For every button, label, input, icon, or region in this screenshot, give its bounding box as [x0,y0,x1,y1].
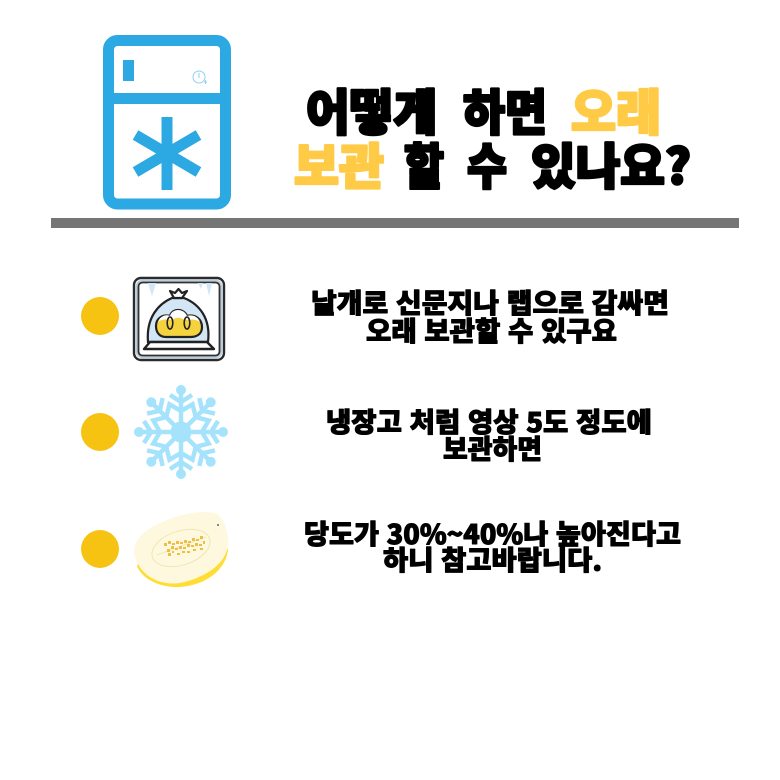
icon: freezer [108,40,226,204]
title: 오래 [571,74,661,145]
item 2: refrigerate [81,385,652,479]
bullet dot 2 [81,413,119,451]
icon: snowflake [134,385,228,479]
text: item 3: 당도가 30%~40%나 높아진다고 [304,513,681,552]
text: item 1: 날개로 신문지나 랩으로 감싸면 [311,282,669,321]
icon: melon half [134,512,228,587]
text: item 2: 보관하면 [443,428,542,467]
icon: frozen dough bag [134,278,224,360]
text: item 3 [304,513,681,578]
title: 수 [467,128,507,199]
title: 하면 [463,74,547,145]
divider bar [51,218,739,228]
text: item 1 [311,282,669,349]
title: 있나요? [531,128,691,199]
text: item 1: 오래 보관할 수 있구요 [366,310,617,349]
text: item 3: 하니 참고바랍니다. [383,539,602,578]
item 1: wrapped bag [81,278,669,360]
title: 어떻게 [306,74,437,145]
item 3: sweetness [81,512,681,587]
text: item 2 [326,401,652,467]
text: item 2: 냉장고 처럼 영상 5도 정도에 [326,401,652,440]
bullet dot 1 [81,297,119,335]
title: 보관 [294,128,384,199]
title: 할 [404,128,444,199]
bullet dot 3 [81,530,119,568]
title [294,74,691,199]
